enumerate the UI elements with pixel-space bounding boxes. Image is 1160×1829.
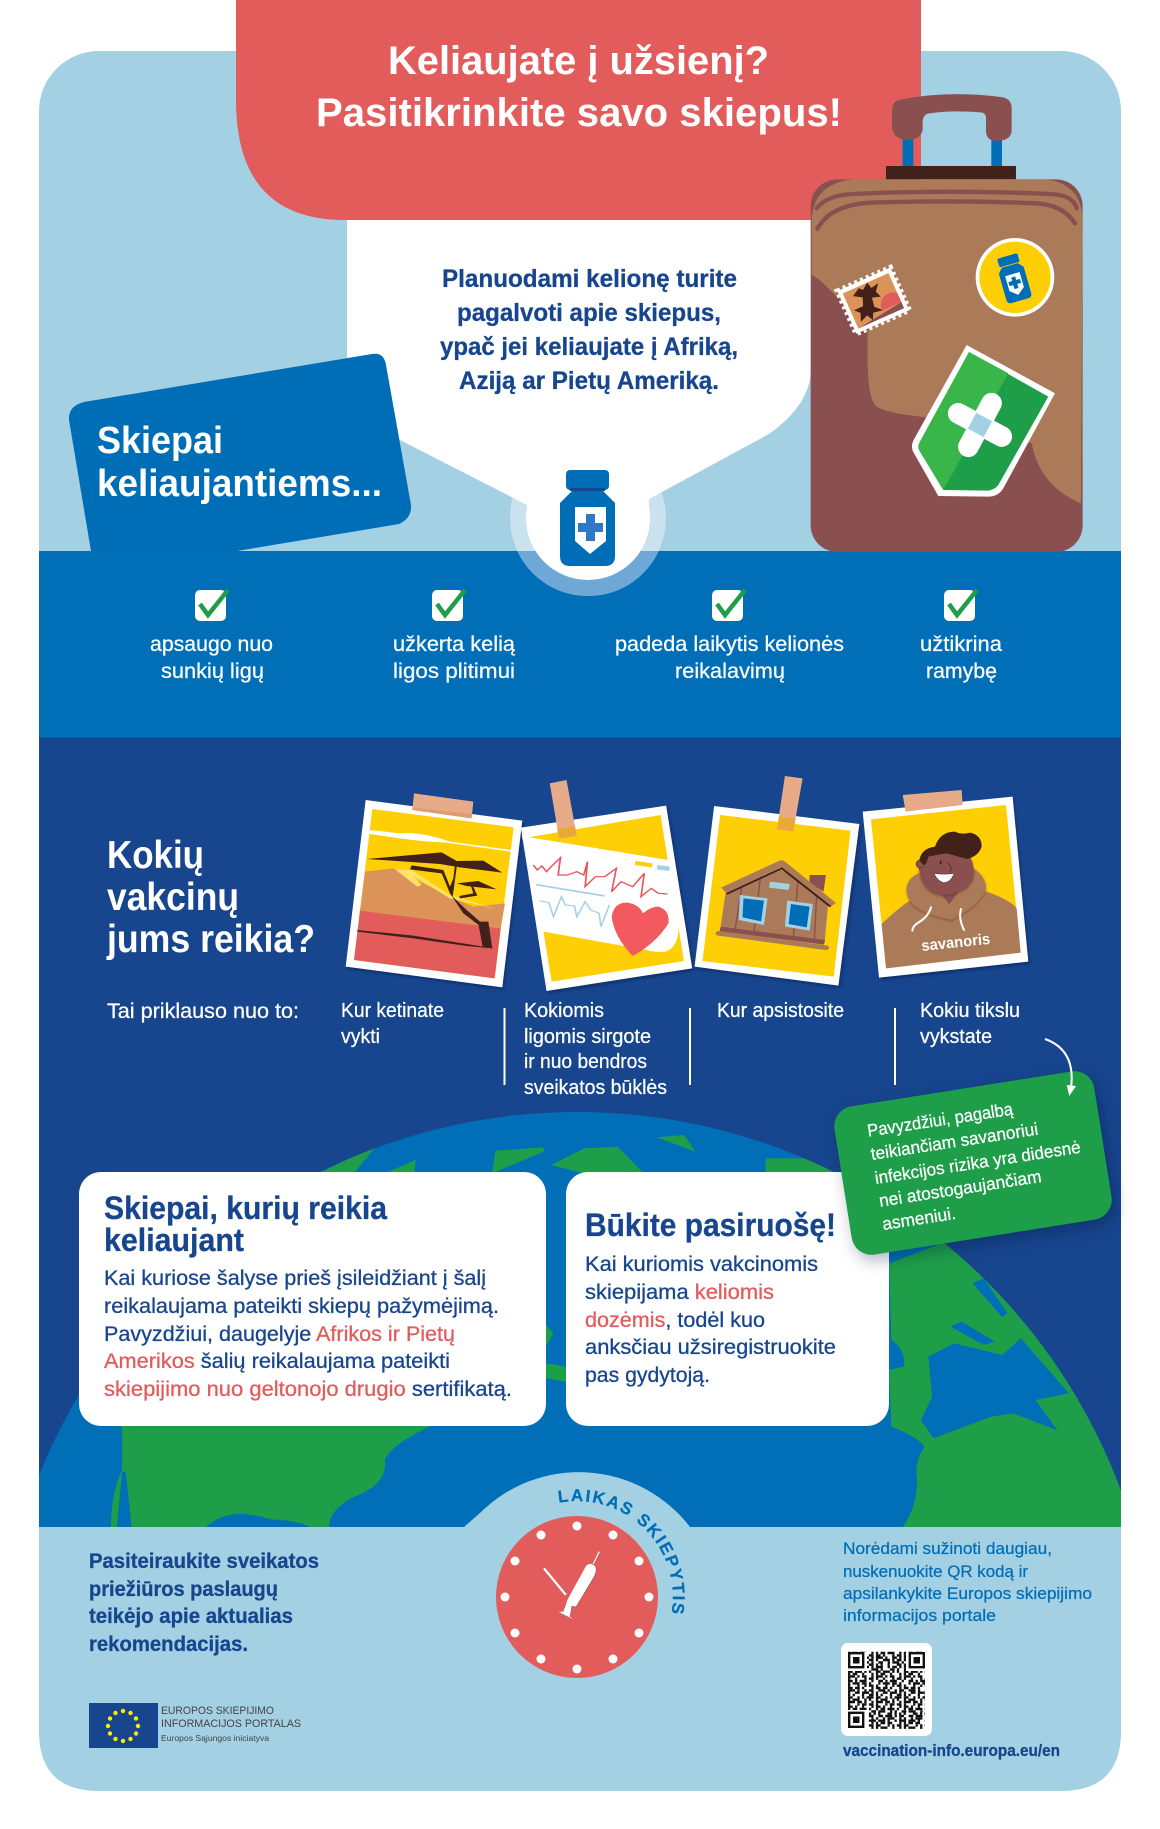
column: Kur ketinate vykti: [341, 1000, 444, 1048]
bubble text: ypač jei keliaujate į Afriką,: [440, 333, 738, 361]
photo: acacia landscape: [346, 800, 522, 987]
tag: Skiepai keliaujantiems: [69, 354, 411, 551]
logo: EU portal: INFORMACIJOS PORTALAS: [161, 1718, 301, 1730]
text: learn more: Norėdami sužinoti daugiau,: [843, 1539, 1052, 1558]
text: ask provider: teikėjo apie aktualias: [89, 1605, 293, 1628]
heading: Kokių vakcinų jums reikia: vakcinų: [107, 876, 239, 919]
card: Būkite pasiruošę: skiepijama keliomis: [585, 1281, 774, 1304]
QR code: [841, 1643, 932, 1736]
label: savanoris: savanoris: [921, 931, 991, 955]
card: Skiepai, kurių reikia keliaujant: Skiepai, kurių reikia: [104, 1190, 387, 1226]
card: Būkite pasiruošę: dozėmis, todėl kuo: [585, 1309, 765, 1332]
card: Būkite pasiruošę: pas gydytoją.: [585, 1364, 710, 1387]
heading: Kokių vakcinų jums reikia: Kokių: [107, 834, 204, 877]
benefit: užkerta: [393, 590, 515, 683]
clock: [496, 1516, 658, 1678]
speech bubble: planning text: [347, 220, 811, 596]
column: Kokiu tikslu: Kokiu tikslu: [920, 1000, 1020, 1022]
photo: volunteer: [863, 797, 1028, 978]
callout: green note: nei atostogaujančiam: [878, 1166, 1043, 1211]
tape: [550, 780, 577, 838]
benefits row: [150, 590, 1002, 683]
tape: [412, 793, 473, 818]
tag: Skiepai keliaujantiems: Skiepai: [97, 420, 223, 462]
card: Būkite pasiruošę: Kai kuriomis vakcinomis: [585, 1253, 818, 1276]
footer: [39, 1472, 1121, 1791]
arrow: [1045, 1039, 1076, 1096]
benefit: užkerta: užkerta kelią: [393, 633, 515, 656]
bubble text: pagalvoti apie skiepus,: [457, 299, 721, 327]
logo: EU portal: Europos Sąjungos iniciatyva: [161, 1734, 270, 1743]
callout: green note: [831, 1068, 1115, 1258]
benefit: padeda: reikalavimų: [675, 660, 785, 683]
card: Būkite pasiruošę: [566, 1172, 889, 1426]
heading: Kokių vakcinų jums reikia: [106, 834, 315, 961]
photo: heart monitor: [521, 806, 692, 991]
card: Skiepai, kurių reikia keliaujant: skiepijimo nuo geltonojo drugio sertifikatą.: [104, 1378, 512, 1401]
stamp sticker: [837, 268, 909, 334]
text: learn more: informacijos portale: [843, 1606, 996, 1625]
globe: [39, 1100, 1160, 1540]
photo: wooden house: [695, 806, 859, 986]
text: learn more: apsilankykite Europos skiepijimo: [843, 1584, 1092, 1603]
logo: EU portal: EUROPOS SKIEPIJIMO: [161, 1705, 274, 1717]
text: ask provider: rekomendacijas.: [89, 1633, 248, 1656]
vial halo: [510, 440, 666, 596]
column: Kur apsistosite: Kur apsistosite: [717, 1000, 844, 1022]
title: Keliaujate į užsienį?: [388, 39, 769, 83]
handle: [886, 94, 1016, 179]
callout: green note: teikiančiam savanoriui: [869, 1119, 1039, 1164]
curved label: LAIKAS SKIEPYTIS: LAIKAS SKIEPYTIS: [558, 1489, 685, 1614]
illustration: suitcase: [811, 94, 1083, 552]
benefit: užkerta: ligos plitimui: [393, 660, 515, 683]
text: learn more: nuskenuokite QR kodą ir: [843, 1562, 1028, 1581]
logo: EU portal: [89, 1703, 301, 1748]
body: [811, 179, 1083, 552]
column: Kur ketinate vykti: Kur ketinate: [341, 1000, 444, 1022]
bubble text: Planuodami kelionę turite: [442, 265, 737, 293]
bubble text: Aziją ar Pietų Ameriką.: [459, 367, 719, 395]
card: Skiepai, kurių reikia keliaujant: Amerikos šalių reikalaujama pateikti: [104, 1350, 450, 1373]
tape: [903, 790, 963, 812]
callout: green note: Pavyzdžiui, pagalbą: [866, 1099, 1014, 1141]
photos row: [346, 776, 1028, 991]
bandage badge: [912, 345, 1055, 497]
benefit: užtikrina: užtikrina: [920, 633, 1002, 656]
title: [316, 39, 842, 135]
text: learn more: [843, 1539, 1092, 1625]
card: Būkite pasiruošę: anksčiau užsiregistruokite: [585, 1336, 836, 1359]
icon: syringe clock hand: [544, 1552, 599, 1619]
tape: [777, 776, 803, 832]
column: Kokiomis ligomis: [524, 1000, 667, 1099]
vial sticker: [976, 238, 1054, 317]
card: Skiepai, kurių reikia keliaujant: [79, 1172, 546, 1426]
column: Kokiomis ligomis: ir nuo bendros: [524, 1051, 647, 1073]
link: vaccination-info: vaccination-info.europa.eu/en: [843, 1741, 1060, 1760]
heading: Kokių vakcinų jums reikia: jums reikia?: [106, 918, 315, 961]
card: Skiepai, kurių reikia keliaujant: keliaujant: [104, 1222, 244, 1258]
benefit: apsaugo: apsaugo nuo: [150, 633, 273, 656]
card: Skiepai, kurių reikia keliaujant: reikalaujama pateikti skiepų pažymėjimą.: [104, 1295, 499, 1318]
text: Tai priklauso nuo to: Tai priklauso nuo to:: [107, 1000, 299, 1023]
header banner: [236, 0, 921, 220]
column: Kokiomis ligomis: sveikatos būklės: [524, 1077, 667, 1099]
callout: green note: infekcijos rizika yra didesnė: [873, 1137, 1082, 1188]
card: Skiepai, kurių reikia keliaujant: Kai kuriose šalyse prieš įsileidžiant į šalį: [104, 1267, 486, 1290]
benefit: užtikrina: [920, 590, 1002, 683]
benefit: padeda: [615, 590, 844, 683]
callout: green note: asmeniui.: [881, 1203, 957, 1234]
title: Pasitikrinkite savo skiepus!: [316, 91, 842, 135]
column: Kokiu tikslu: vykstate: [920, 1026, 992, 1048]
benefit: užtikrina: ramybę: [926, 660, 997, 683]
text: ask provider: [89, 1550, 319, 1656]
benefit: apsaugo: [150, 590, 273, 683]
tag: Skiepai keliaujantiems: keliaujantiems...: [97, 463, 382, 505]
column: Kokiomis ligomis: ligomis sirgote: [524, 1026, 651, 1048]
column: Kokiomis ligomis: Kokiomis: [524, 1000, 604, 1022]
text: ask provider: priežiūros paslaugų: [89, 1578, 278, 1601]
card: Būkite pasiruošę: Būkite pasiruošę!: [585, 1207, 836, 1243]
text: ask provider: Pasiteiraukite sveikatos: [89, 1550, 319, 1573]
icon: vial: [560, 470, 615, 566]
benefit: padeda: padeda laikytis kelionės: [615, 633, 844, 656]
column: Kokiu tikslu: [920, 1000, 1020, 1048]
column: Kur ketinate vykti: vykti: [341, 1026, 380, 1048]
bubble text: [440, 265, 738, 395]
card: Skiepai, kurių reikia keliaujant: Pavyzdžiui, daugelyje Afrikos ir Pietų: [104, 1323, 455, 1346]
benefit: apsaugo: sunkių ligų: [161, 660, 264, 683]
